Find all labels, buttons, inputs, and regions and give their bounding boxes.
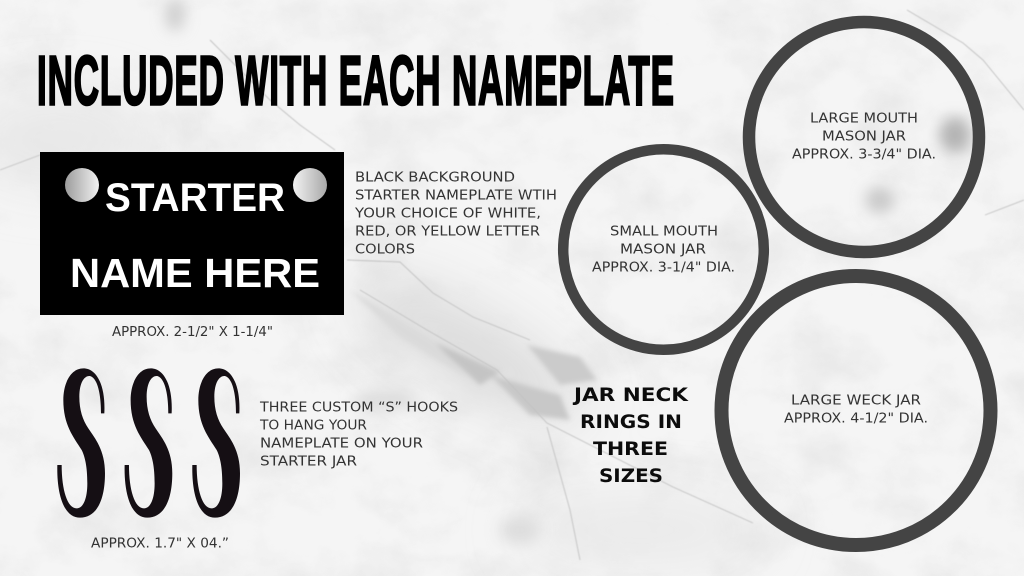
ring: large mouth mason jar: APPROX. 3-3/4" DIA.: [792, 148, 936, 162]
ring: large mouth mason jar: MASON JAR: [822, 130, 906, 144]
nameplate description: COLORS: [355, 242, 415, 258]
ring: small mouth mason jar: SMALL MOUTH: [610, 224, 718, 240]
heading: jar neck rings in three sizes: RINGS IN: [580, 411, 682, 433]
panel: starter nameplate: [40, 152, 344, 315]
hook description: TO HANG YOUR: [259, 418, 367, 434]
hook description: [259, 400, 458, 470]
icon: right mounting hole: [293, 168, 327, 202]
nameplate description: YOUR CHOICE OF WHITE,: [354, 206, 541, 222]
nameplate description: BLACK BACKGROUND: [355, 170, 515, 186]
ring: large mouth mason jar: [749, 22, 979, 252]
hook description: NAMEPLATE ON YOUR: [260, 436, 423, 452]
nameplate description: RED, OR YELLOW LETTER: [355, 224, 540, 240]
nameplate description: STARTER NAMEPLATE WTIH: [355, 188, 557, 204]
hook description: STARTER JAR: [260, 454, 357, 470]
ring: large weck jar: LARGE WECK JAR: [791, 394, 921, 408]
nameplate description: [354, 170, 557, 258]
heading: jar neck rings in three sizes: [572, 384, 689, 487]
hook description: THREE CUSTOM “S” HOOKS: [259, 400, 458, 416]
title: INCLUDED WITH EACH NAMEPLATE: [37, 41, 674, 120]
heading: jar neck rings in three sizes: SIZES: [599, 465, 663, 487]
nameplate size caption: APPROX. 2-1/2" X 1-1/4": [112, 325, 273, 340]
ring: small mouth mason jar: [563, 149, 764, 350]
ring: small mouth mason jar: MASON JAR: [620, 242, 706, 258]
heading: jar neck rings in three sizes: THREE: [593, 438, 668, 460]
icon: left mounting hole: [65, 168, 99, 202]
ring: small mouth mason jar: APPROX. 3-1/4" DIA.: [592, 260, 735, 276]
ring: large weck jar: [722, 276, 990, 545]
hook size caption: APPROX. 1.7" X 04.”: [91, 536, 229, 552]
ring: large mouth mason jar: LARGE MOUTH: [810, 112, 918, 126]
nameplate line: name here: NAME HERE: [70, 250, 320, 296]
icon: three S hooks: [57, 368, 240, 518]
heading: jar neck rings in three sizes: JAR NECK: [572, 384, 689, 406]
nameplate line: starter: STARTER: [105, 176, 285, 220]
ring: large weck jar: APPROX. 4-1/2" DIA.: [784, 412, 928, 426]
